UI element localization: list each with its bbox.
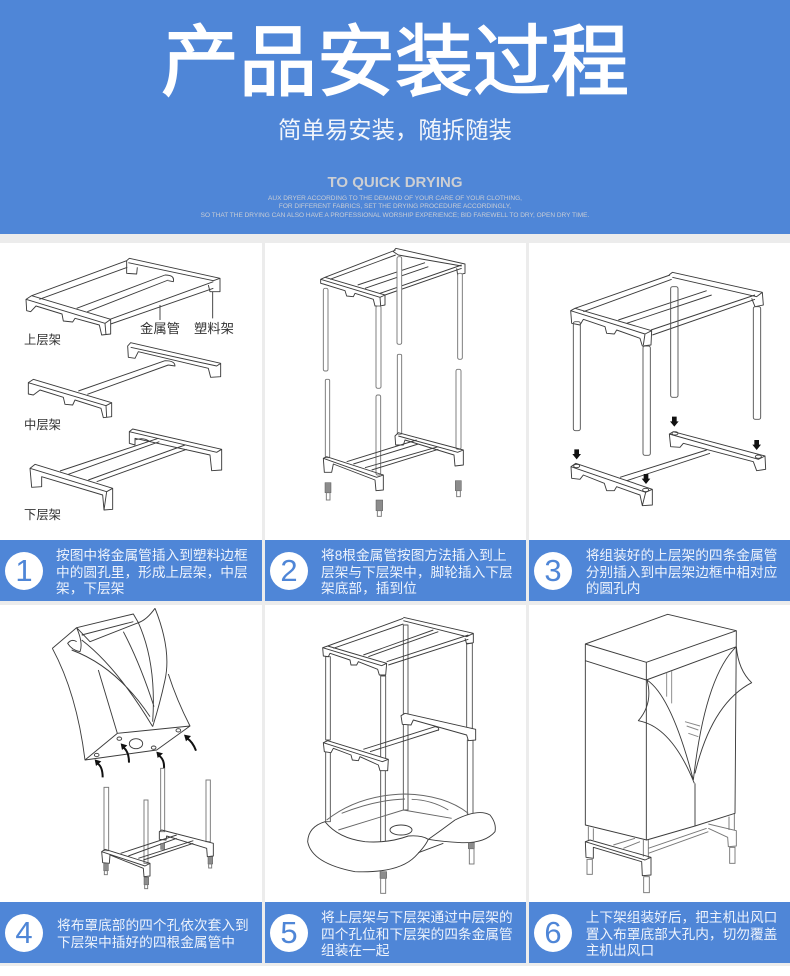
caption bar 2 [265,540,526,601]
number 1 [5,552,43,590]
caption text 3: 的圆孔内 [586,581,640,596]
caption text 6: 置入布罩底部大孔内，切勿覆盖 [586,927,777,942]
panel: step 4 cover [0,605,262,902]
drawing: middle frame [323,713,476,771]
caption text 6 [586,910,777,958]
number 4: 4 [15,915,33,950]
label: lower rack: 下层架 [24,508,61,522]
caption text 5: 组装在一起 [321,943,389,958]
english description [201,194,589,219]
caption text 5 [321,910,513,958]
header band [0,0,790,234]
panel: step 3 insert [529,243,790,540]
drawing: casters [380,843,474,893]
caption text 3 [586,548,777,596]
number 2 [270,552,308,590]
drawing: four legs [573,287,761,455]
drawing: casters [325,481,461,516]
caption bar 5 [265,902,526,963]
label: upper rack: 上层架 [24,333,61,347]
number 5: 5 [280,915,298,950]
arrows: curved up [95,735,196,777]
drawing: cover box [585,614,736,840]
number 3: 3 [544,553,562,588]
caption text 3: 分别插入到中层架边框中相对应 [586,565,777,580]
panel: step 2 pipes [265,243,526,540]
drawing: tubes and base [102,768,213,889]
caption text 3: 将组装好的上层架的四条金属管 [586,548,777,563]
caption text 2: 架底部，插到位 [321,581,417,596]
caption bar 6 [529,902,790,963]
drawing: lower rack [30,429,222,510]
caption text 4: 下层架中插好的四根金属管中 [57,935,235,950]
english description: FOR DIFFERENT FABRICS, SET THE DRYING PROCEDURE ACCORDINGLY, [279,203,511,210]
panel: step 5 assemble [265,605,526,902]
drawing: tubes [326,625,473,843]
drawing: eight tubes [323,257,462,475]
english description: AUX DRYER ACCORDING TO THE DEMAND OF YOUR CARE OF YOUR CLOTHING, [268,194,522,202]
drawing: frame legs and base [585,813,736,893]
label: middle rack: 中层架 [24,417,61,432]
drawing: top frame [321,248,465,306]
number 4 [5,914,43,952]
number 1: 1 [15,553,33,588]
number 2: 2 [280,553,298,588]
caption bar 3 [529,540,790,601]
caption text 6: 主机出风口 [586,943,654,958]
number 3 [534,552,572,590]
drawing: upper rack [26,258,220,335]
drawing: open flaps [638,647,752,783]
number 6 [534,914,572,952]
caption text 1: 架，下层架 [56,581,124,596]
caption text 4 [57,918,249,950]
drawing: fabric base [308,794,495,872]
caption text 6: 上下架组装好后，把主机出风口 [586,910,777,925]
caption text 1 [56,548,248,596]
label: metal tube: 金属管 [140,321,180,336]
caption text 2: 将8根金属管按图方法插入到上 [321,548,507,563]
caption text 2: 层架与下层架中，脚轮插入下层 [321,565,513,580]
caption bar 1 [0,540,262,601]
panel: step 1 frames [0,243,262,540]
arrows: down [572,417,761,484]
drawing: fabric cover [52,608,190,760]
number 5 [270,914,308,952]
caption text 1: 按图中将金属管插入到塑料边框 [56,548,248,563]
english heading: TO QUICK DRYING [327,174,462,191]
title: 产品安装过程 [161,18,629,106]
drawing: top frame [323,617,473,675]
caption text 4: 将布罩底部的四个孔依次套入到 [57,918,249,933]
drawing: middle frame [571,432,766,506]
caption text 5: 将上层架与下层架通过中层架的 [321,910,513,925]
panel: step 6 finished [529,605,790,902]
label: plastic frame: 塑料架 [194,321,234,336]
subtitle: 简单易安装，随拆随装 [278,117,512,143]
page background [0,234,790,966]
caption text 1: 中的圆孔里，形成上层架，中层 [56,565,248,580]
drawing: middle rack [28,343,221,418]
drawing: upper frame [571,272,763,346]
caption bar 4 [0,902,262,963]
caption text 2 [321,548,513,596]
number 6: 6 [544,915,562,950]
caption text 5: 四个孔位和下层架的四条金属管 [321,927,513,942]
drawing: bottom frame [323,433,463,491]
english description: SO THAT THE DRYING CAN ALSO HAVE A PROFESSIONAL WORSHIP EXPERIENCE; BID FAREWELL TO DRY, OPEN DRY TIME. [201,212,589,219]
